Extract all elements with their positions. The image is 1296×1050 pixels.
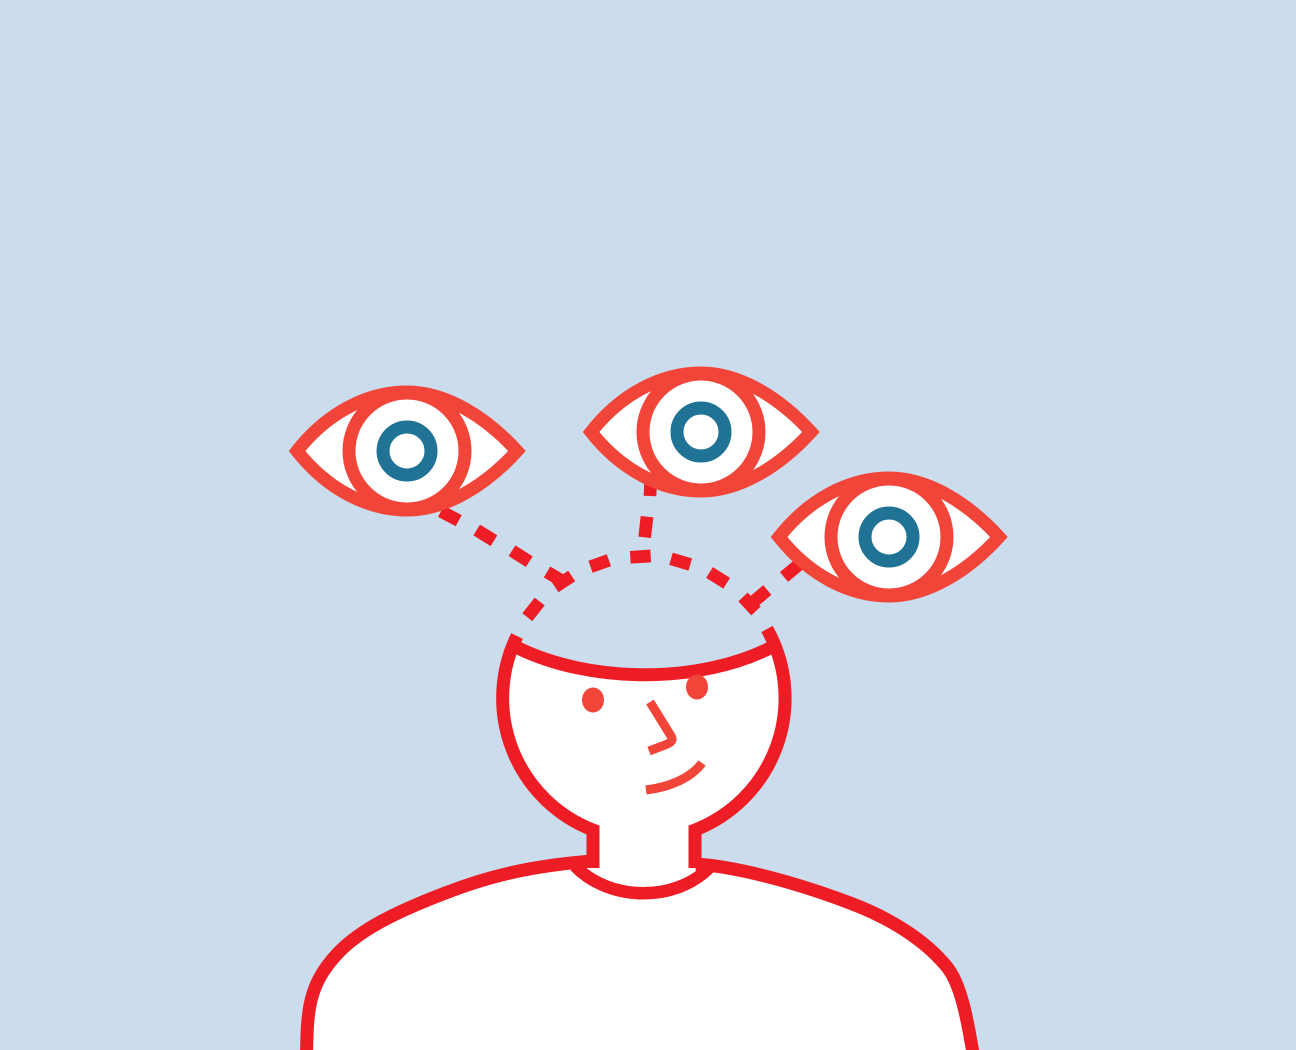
left eye dot — [582, 688, 604, 712]
mouth — [646, 763, 702, 790]
right eye dot — [686, 674, 708, 700]
eye: centre — [591, 373, 811, 491]
nose — [649, 702, 672, 751]
dotted connector: left eye — [441, 511, 564, 582]
body and shoulders — [306, 861, 974, 1050]
dotted head dome — [527, 556, 756, 617]
eye: left — [297, 392, 517, 510]
collar — [575, 866, 709, 893]
head and neck — [503, 629, 785, 868]
eye: right — [779, 478, 999, 596]
face — [582, 674, 708, 790]
head opening edge — [516, 647, 772, 675]
dotted connector: right eye — [755, 562, 802, 601]
dotted connector: centre eye — [645, 484, 650, 537]
